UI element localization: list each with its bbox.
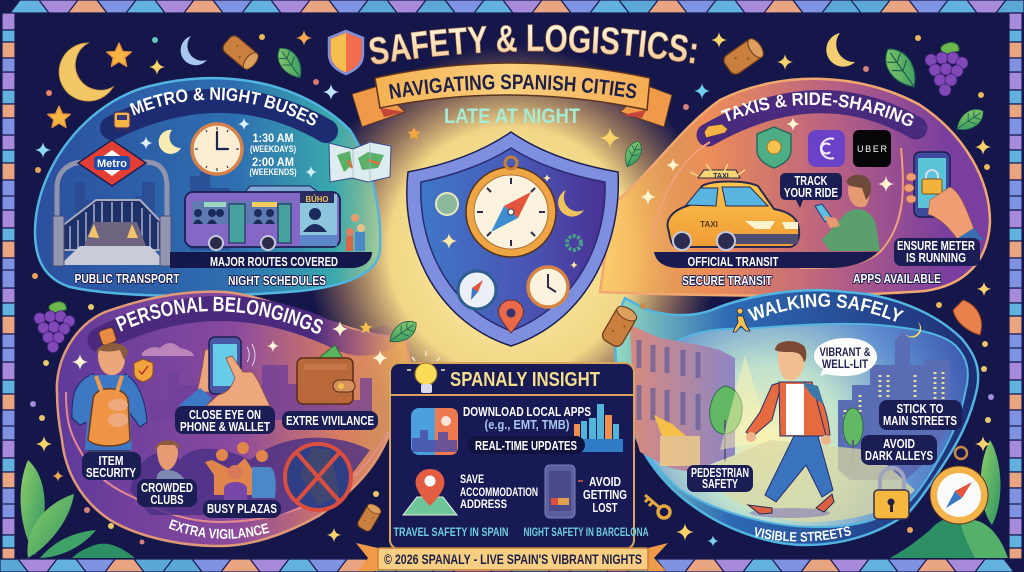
label: crowded clubs: CLUBS [150,492,184,507]
text: avoid getting lost: AVOID [589,474,621,489]
small globe [436,193,458,215]
icon: big moon [59,43,113,101]
small compass [458,271,496,309]
callout: vibrant and well-lit [814,338,877,376]
icon: lightbulb [407,351,445,393]
icon: metro sign: Metro [97,158,127,170]
label: item security: ITEM [98,453,124,468]
icon: phone low battery [545,465,575,518]
label: official transit: OFFICIAL TRANSIT [688,254,779,269]
icon: night bus: BÚHO [306,193,329,204]
icon: cork [221,33,261,72]
callout: vibrant and well-lit: VIBRANT & [820,345,871,359]
label: pedestrian safety: PEDESTRIAN [691,465,749,480]
shield sparkles [441,174,578,269]
small clock [528,267,568,307]
icon: local apps [411,408,458,455]
label: extre vivilance: EXTRE VIVILANCE [286,413,374,428]
label: avoid dark alleys: AVOID [883,436,915,451]
label: stick to main streets: STICK TO [896,401,944,416]
icon: ride app [808,130,845,167]
label: public transport: PUBLIC TRANSPORT [74,271,180,286]
icon: small bag [98,327,117,346]
label: pedestrian safety: SAFETY [702,476,738,491]
icon: grapes [34,302,75,353]
icon: cloud [142,343,194,356]
subtitle: LATE AT NIGHT [444,105,580,128]
icon: bottom-right leaves [890,440,1008,558]
panel title: METRO & NIGHT BUSES [130,87,318,126]
label: stick to main streets [879,400,962,430]
inner scene [635,324,968,527]
panel: spanaly insight [390,351,649,549]
icon: clock [192,124,242,174]
label: secure transit: SECURE TRANSIT [682,273,772,288]
icon: no pickpocket [285,444,351,510]
icon: wallet [297,345,355,404]
icon: uber app: UBER [857,144,888,154]
icon: oak leaf [272,43,308,83]
footer banner [356,543,668,571]
label: apps available: APPS AVAILABLE [853,271,941,286]
text: download local apps: DOWNLOAD LOCAL APPS [463,404,591,419]
label: busy plazas: BUSY PLAZAS [207,501,277,516]
night times [250,131,297,177]
icon: padlock [874,468,909,519]
inner outline [652,142,903,268]
label: stick to main streets: MAIN STREETS [883,413,957,428]
label: real-time updates [468,436,585,454]
gear [567,236,581,250]
icon: stars [48,43,131,128]
sparkles and dots [30,282,994,547]
icon: map pin [403,469,457,515]
label: extre vivilance [282,411,378,430]
icon: phone in hand [904,152,984,240]
sparkles and dots [32,30,339,279]
banner [352,62,672,128]
icon: moon and stars [140,118,317,178]
night times: (WEEKDAYS) [250,144,296,154]
label: close eye on phone and wallet: CLOSE EYE ON [189,407,261,422]
title band [112,101,326,131]
icon: moon [826,33,855,67]
icon: cork [721,36,766,77]
decor: top-left night sky [32,30,339,279]
panel: metro and night buses [34,76,392,297]
callout: track your ride: TRACK [794,173,828,188]
label: pedestrian safety [687,465,753,492]
icon: map [329,142,391,182]
decor: mid cork and leaves [21,282,1008,558]
label: real-time updates: REAL-TIME UPDATES [475,438,577,453]
label: close eye on phone and wallet [175,406,275,434]
moon [905,321,921,338]
icon: security shield [757,127,791,168]
icon: key [645,495,670,518]
icon: people waiting [346,214,365,251]
icon: grapes [925,42,968,96]
icon: leaf [878,42,924,94]
progress bar [570,439,623,452]
title band [708,102,916,135]
star [360,322,372,333]
icon: bus [114,112,130,132]
icon: bottom-left leaves [21,460,135,558]
header divider [391,394,633,396]
label: busy plazas [203,500,281,518]
moon [558,190,584,217]
decor: top-right night sky [407,32,991,170]
label: ensure meter is running [894,238,980,266]
text: save accommodation address: SAVE [460,472,484,486]
icon: leaf [385,316,421,348]
icon: taxi [668,164,799,250]
label: ensure meter is running: ENSURE METER [897,238,975,253]
text: save accommodation address: ACCOMMODATION [460,485,538,499]
icon: person with phone [815,175,880,251]
shield [407,132,618,346]
icon: autumn leaf [953,300,982,335]
icon: pedestrian [733,308,750,332]
label: avoid dark alleys: DARK ALLEYS [865,448,933,463]
panel title: PERSONAL BELONGINGS [115,296,323,334]
label: crowded clubs [137,479,197,507]
compass watch [466,157,556,257]
decor: title shield [329,31,363,74]
night times: 2:00 AM [252,155,294,169]
night times: 1:30 AM [252,131,294,145]
icon: person in club [148,440,185,485]
icon: mini skyline [574,404,619,439]
glow behind shield [307,45,717,455]
link: night safety in barcelona: NIGHT SAFETY IN BARCELONA [524,525,649,539]
callout: track your ride: YOUR RIDE [784,185,838,200]
map pin [499,300,523,333]
text: save accommodation address [460,472,538,511]
label: avoid dark alleys [861,435,937,465]
panel: taxis and ride-sharing [598,78,992,297]
icon: night bus [185,186,340,250]
city silhouette [75,172,230,250]
streetlight glow [720,355,770,450]
panel title: WALKING SAFELY [747,293,904,322]
footer text: © 2026 SPANALY - LIVE SPAIN'S VIBRANT NIGHTS [384,551,642,567]
insight heading: SPANALY INSIGHT [450,369,600,391]
text: avoid getting lost: LOST [592,500,618,515]
banner text: NAVIGATING SPANISH CITIES [388,74,637,99]
night times: (WEEKENDS) [250,167,297,177]
text: save accommodation address: ADDRESS [460,497,507,511]
title band [100,308,385,343]
icon: compass [930,447,988,524]
title: SAFETY & LOGISTICS: [369,24,697,64]
callout: track your ride [780,173,842,208]
label: item security: SECURITY [86,465,136,480]
icon: busy crowd [205,442,276,500]
label: visible streets: VISIBLE STREETS [755,526,851,542]
street [700,440,915,522]
panel title: TAXIS & RIDE-SHARING [720,92,914,126]
icon: badge dot [767,140,781,154]
text: avoid getting lost [578,474,627,515]
icon: taxi: TAXI [713,173,729,180]
icon: uber app [853,130,891,167]
label band [170,252,372,268]
buildings [630,325,735,472]
icon: metro entrance [53,162,171,266]
label: major routes covered: MAJOR ROUTES COVERED [210,254,338,269]
sparkles [640,117,894,205]
label: close eye on phone and wallet: PHONE & WALLET [180,419,270,434]
inner outline [66,392,388,522]
trees [710,386,863,468]
icon: small cork [356,502,383,533]
city skyline [838,332,950,480]
panel: walking safely [614,288,980,546]
icon: phone and hand [178,337,270,406]
sparkles [72,321,388,370]
icon: centre leaf [621,138,645,170]
panel: personal belongings [56,290,412,548]
icon: person with backpack [72,343,147,470]
label band [654,252,878,268]
label: ensure meter is running: IS RUNNING [906,250,966,265]
callout: vibrant and well-lit: WELL-LIT [822,357,869,371]
icon: small leaf [952,104,988,136]
walking person [746,341,834,518]
link: travel safety in spain: TRAVEL SAFETY IN SPAIN [394,525,508,539]
label: extra vigilance: EXTRA VIGILANCE [168,519,270,539]
icon: taxi: TAXI [700,220,718,229]
icon: blue moon [181,36,207,65]
label: night schedules: NIGHT SCHEDULES [228,273,326,288]
label: item security [82,452,141,480]
icon: small taxi [704,124,728,138]
icon: cork [600,303,639,349]
sparkles and dots [407,32,991,170]
label: crowded clubs: CROWDED [141,480,193,495]
icon: small shield [134,359,153,382]
crowd silhouette [130,438,370,515]
text: avoid getting lost: GETTING [583,487,627,502]
icon: metro sign [78,140,146,186]
skyline [150,365,372,420]
text: examples: (e.g., EMT, TMB) [484,417,570,432]
